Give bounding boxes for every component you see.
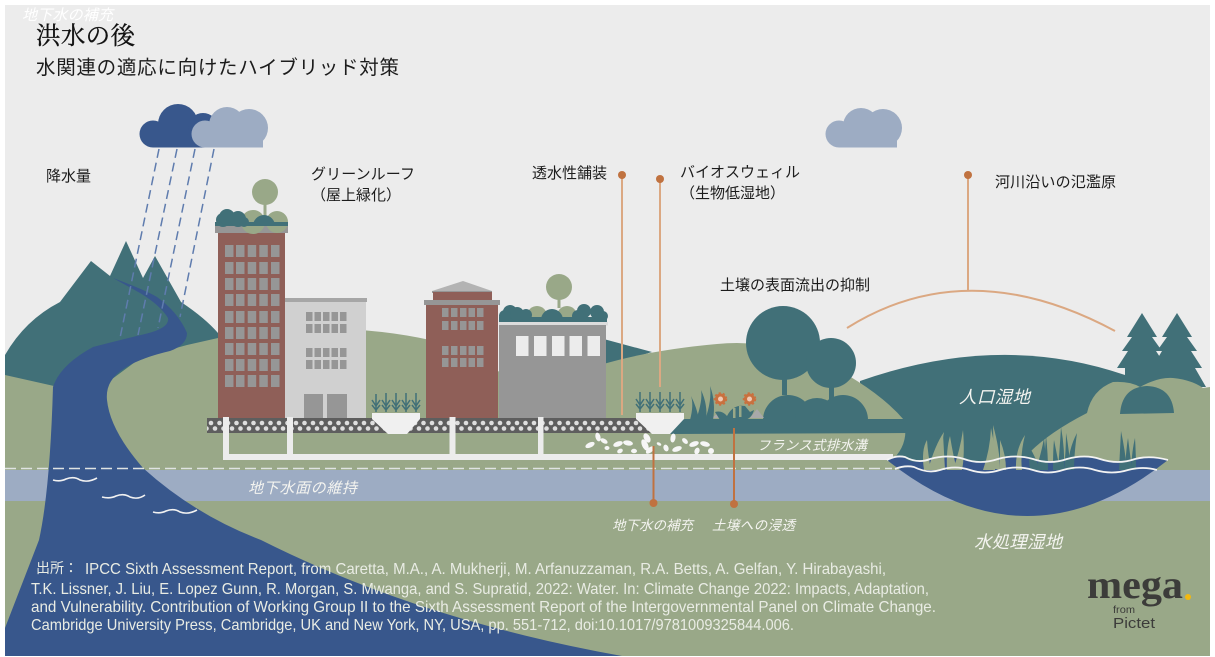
drainage pipes: [223, 417, 893, 460]
source citation: T.K. Lissner, J. Liu, E. Lopez Gunn, R. Morgan, S. Mwanga, and S. Supratid, 2022: Water. In: Climate Change 2022: Impacts, Adaptation,: [31, 581, 929, 598]
label: bioswale: [680, 164, 800, 202]
source citation: IPCC Sixth Assessment Report, from Caretta, M.A., A. Mukherji, M. Arfanuzzaman, R.A. Betts, A. Gelfan, Y. Hirabayashi,: [85, 561, 886, 578]
river: [5, 278, 622, 656]
stray label top: 地下水の補充: [22, 7, 115, 24]
label: green roof: [311, 166, 415, 204]
label: floodplain: 河川沿いの氾濫原: [995, 174, 1116, 191]
logo: mega from Pictet: from: [1113, 605, 1135, 616]
green landscape: [5, 328, 1210, 656]
wetland teal hill: [860, 355, 1125, 465]
water table dashed line: [5, 468, 892, 470]
label: water treatment wetland: 水処理湿地: [974, 532, 1064, 552]
planter left: [372, 393, 420, 434]
teal mound under conifers: [1120, 386, 1174, 414]
conifer trees: [1117, 313, 1206, 390]
subtitle: 水関連の適応に向けたハイブリッド対策: [36, 56, 399, 79]
planter right: [636, 392, 684, 434]
bioswale shrubs and trees: [746, 306, 868, 420]
label: bioswale: （生物低湿地）: [680, 185, 785, 202]
rain cloud: [140, 104, 268, 148]
logo: mega from Pictet: [1087, 562, 1191, 632]
wetland water waves: [887, 456, 1168, 472]
gravel pavement: [207, 418, 652, 433]
label: permeable paving: 透水性舗装: [532, 165, 607, 182]
callout lines and markers: [618, 171, 1115, 508]
source citation: 出所：: [36, 560, 78, 576]
label: runoff reduction: 土壌の表面流出の抑制: [720, 277, 870, 294]
rain: [120, 149, 214, 338]
wetland reeds teal: [1029, 427, 1136, 470]
infiltration gravel: [584, 432, 714, 455]
vegetation strip: [670, 419, 907, 434]
cloud right: [826, 108, 902, 148]
treatment wetland basin: [887, 456, 1168, 516]
label: bioswale: バイオスウェィル: [680, 164, 800, 181]
grey building with green roof: [499, 274, 608, 418]
logo: mega from Pictet: mega: [1087, 562, 1183, 607]
label: green roof: グリーンルーフ: [311, 166, 415, 183]
logo: mega from Pictet: Pictet: [1113, 615, 1156, 632]
wetland reeds green: [923, 425, 1025, 470]
label: water table: 地下水面の維持: [248, 480, 359, 497]
label: precipitation: 降水量: [46, 168, 91, 185]
source citation: [31, 560, 936, 634]
label: groundwater recharge: 地下水の補充: [612, 518, 696, 533]
green roof on tall building: [215, 179, 288, 234]
label: green roof: （屋上緑化）: [311, 187, 401, 204]
title: 洪水の後: [36, 22, 136, 50]
right green hill: [1030, 378, 1210, 470]
label: soil infiltration: 土壌への浸透: [712, 518, 798, 533]
tall brick building: [215, 226, 288, 418]
bioswale planting with flowers: [690, 386, 764, 420]
label: french drain: フランス式排水溝: [757, 438, 870, 453]
light grey building: [285, 298, 367, 418]
source citation: Cambridge University Press, Cambridge, UK and New York, NY, USA, pp. 551-712, doi:10.1017/9781009325844.006.: [31, 617, 794, 634]
small brick building: [424, 281, 500, 418]
distant teal hill: [600, 338, 652, 368]
mountains: [5, 241, 218, 400]
source citation: and Vulnerability. Contribution of Working Group II to the Sixth Assessment Report of the Intergovernmental Panel on Climate Change.: [31, 599, 936, 616]
label: constructed wetland: 人口湿地: [959, 387, 1032, 407]
groundwater band: [5, 470, 1210, 501]
river ripples: [53, 478, 197, 513]
